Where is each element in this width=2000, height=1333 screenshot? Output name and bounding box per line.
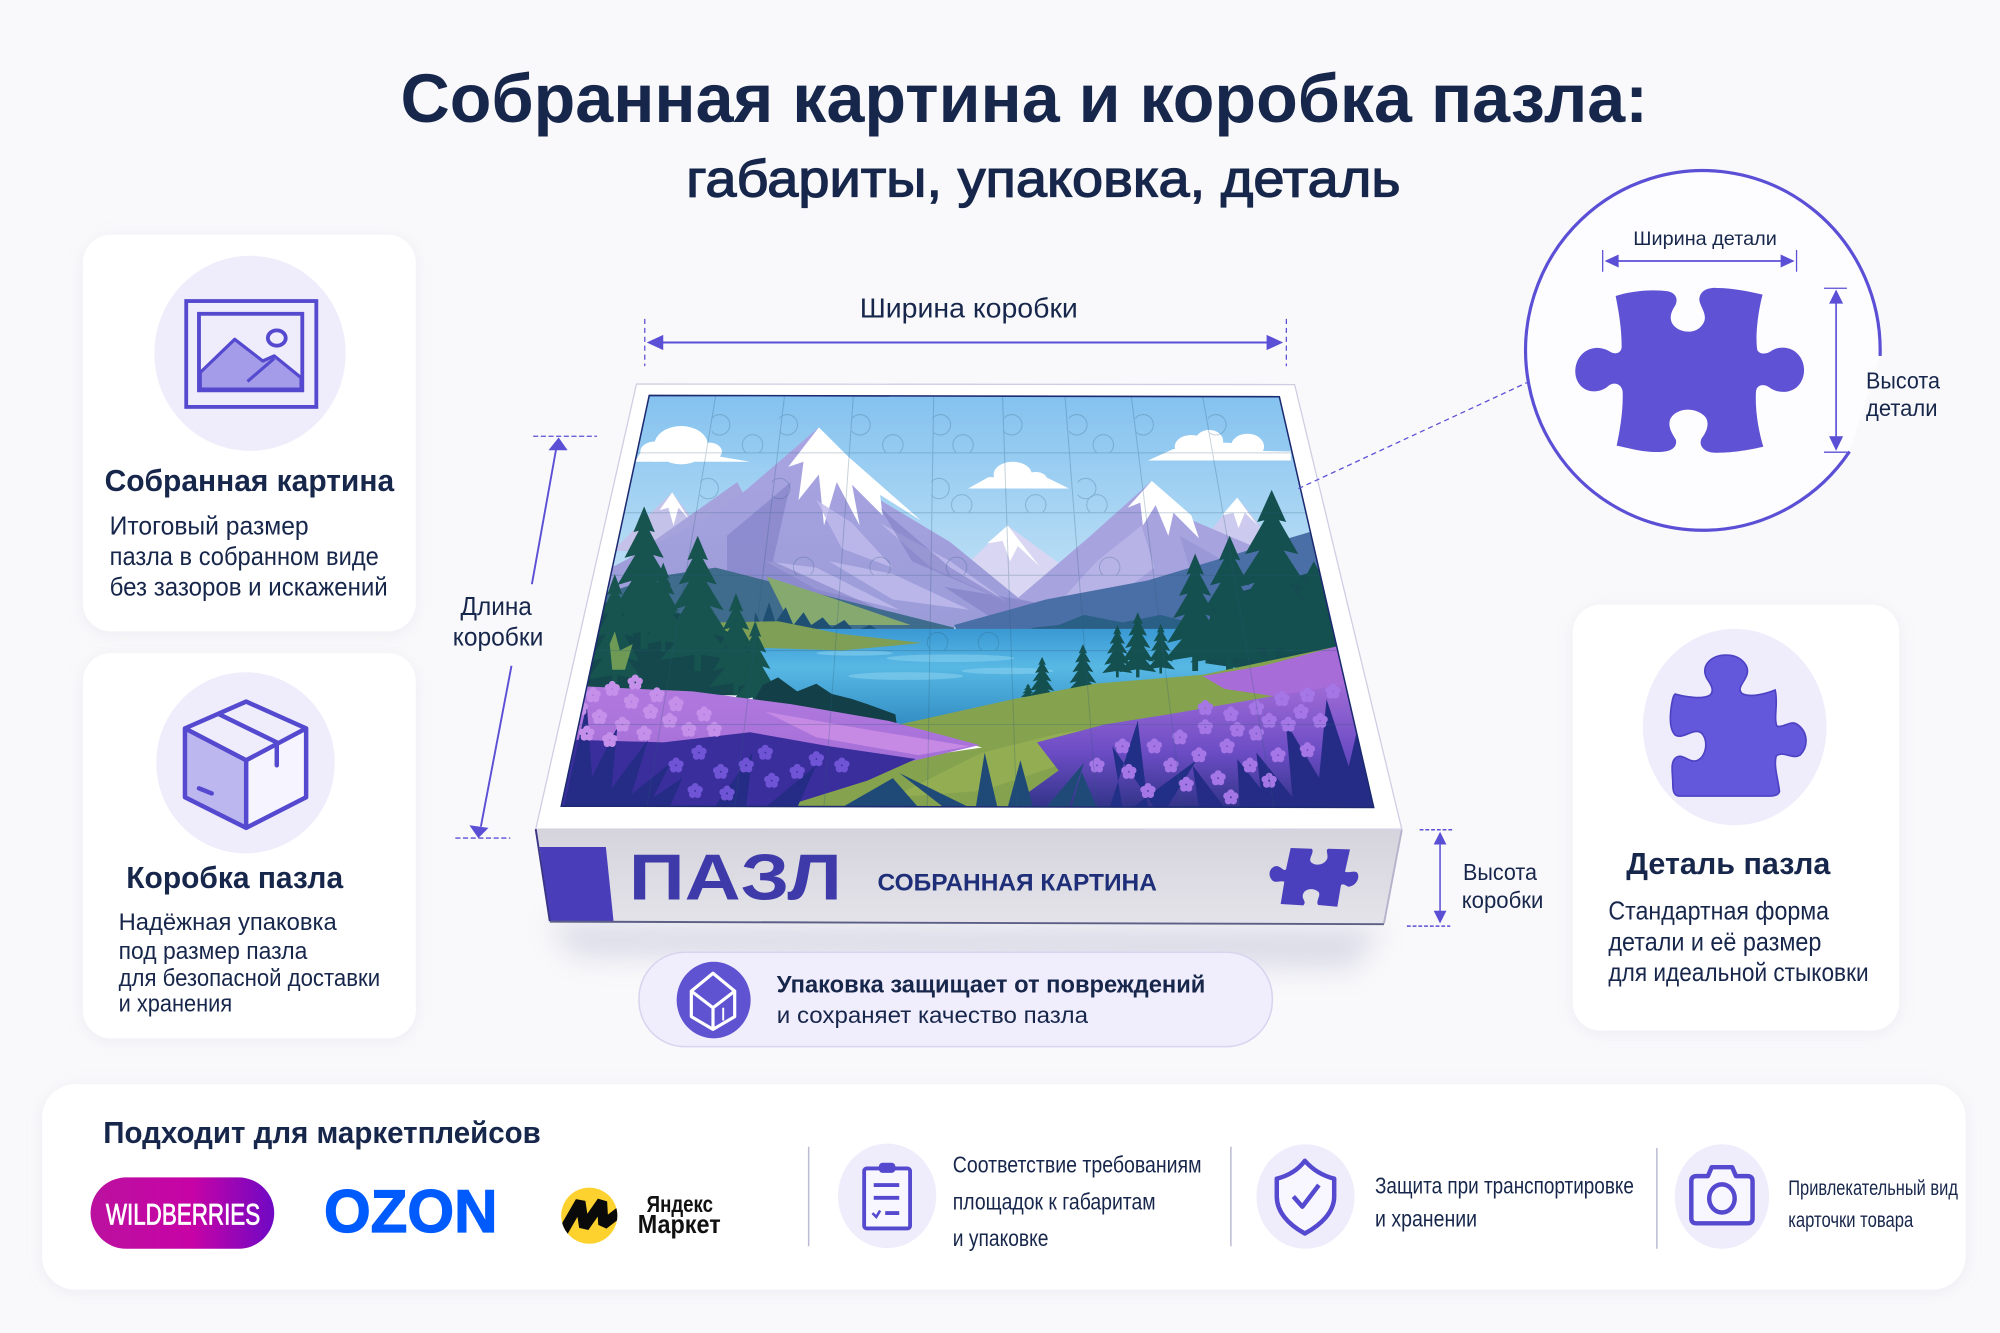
panel: assembled picture [83,235,416,631]
icon: cardboard box [156,672,335,853]
text: callout: и сохраняет качество пазла [777,1002,1088,1028]
flowers [1089,683,1341,804]
right mountain [1018,481,1250,602]
text: transport: и хранении [1375,1205,1477,1231]
lake [752,628,1237,724]
text: puzzle piece description: Стандартная форма [1608,898,1830,926]
text: puzzle piece description: для идеальной стыковки [1608,959,1869,987]
logo: Yandex Market [561,1188,721,1244]
logo: Wildberries [91,1177,274,1249]
text: requirements: площадок к габаритам [953,1188,1156,1214]
subtitle: габариты, упаковка, деталь [686,150,1401,208]
text: puzzle box description: Надёжная упаковка [119,909,337,936]
text: requirements [953,1151,1202,1251]
promontory [714,621,922,651]
text: product card [1788,1175,1958,1232]
text: assembled picture description: без зазоров и искажений [110,574,388,602]
far hills [954,532,1318,629]
puzzle cut lines [571,397,1355,807]
text: assembled picture description: пазла в собранном виде [110,543,379,571]
logo: Ozon: OZON [324,1178,497,1245]
text: callout [777,971,1205,1028]
detail circle: puzzle piece dimensions [1526,171,1940,530]
panel: puzzle box [83,653,416,1038]
title: Собранная картина и коробка пазла: [401,60,1648,137]
text: transport: Защита при транспортировке [1375,1172,1634,1198]
left green plant [610,631,633,670]
dimension: piece height [1824,288,1940,452]
left trees [588,602,750,696]
heading: puzzle box: Коробка пазла [126,861,344,895]
dark shoreline [754,677,896,723]
dimension: box height [1407,830,1543,926]
icon: picture frame [154,256,346,451]
dimension: box width [645,293,1286,366]
box label: ПАЗЛ: ПАЗЛ [629,840,842,913]
text: callout: Упаковка защищает от повреждений [777,971,1205,998]
text: requirements: Соответствие требованиям [953,1151,1202,1177]
box label: assembled picture: СОБРАННАЯ КАРТИНА [878,869,1157,896]
puzzle picture: mountain lake [548,389,1390,816]
icon: camera [1691,1167,1753,1223]
main mountain [609,428,1020,628]
clouds [635,426,1291,489]
icon: puzzle piece on box [1270,848,1358,907]
icon: clipboard [864,1163,910,1228]
callout: packaging protection [639,952,1272,1047]
box top face [536,384,1402,829]
text: puzzle piece description [1608,898,1869,987]
logo: Yandex Market: Яндекс [647,1191,713,1217]
panel: marketplaces and benefits [90,1120,1958,1251]
text: assembled picture description [110,512,388,602]
heading: marketplaces: Подходит для маркетплейсов [103,1116,541,1150]
dimension: box height: Высота [1463,859,1537,885]
dimension: piece height: Высота [1866,367,1940,393]
text: puzzle box description: для безопасной доставки [119,965,380,992]
far tree lines [754,602,876,629]
heading: assembled picture: Собранная картина [105,464,395,498]
meadows [798,646,1336,806]
panel: puzzle piece [1573,605,1899,1031]
benefit: marketplace requirements [838,1144,1202,1251]
foreground leaves [564,699,1375,807]
logo: Wildberries: WILDBERRIES [106,1199,260,1232]
text: product card: карточки товара [1788,1207,1914,1232]
text: puzzle piece description: детали и её размер [1608,928,1821,956]
dimension: piece width: Ширина детали [1633,228,1777,250]
right trees [1205,574,1335,668]
dimension: box width: Ширина коробки [860,293,1078,324]
text: puzzle box description: и хранения [119,991,232,1018]
dimension: box length: Длина [460,593,533,621]
box illustration [536,384,1402,969]
icon: protected box [677,962,751,1038]
puzzle piece large [1575,288,1804,453]
logo: Yandex Market: Маркет [638,1211,721,1239]
box front face [536,829,1402,924]
dimension: box height: коробки [1462,887,1543,913]
benefit: transport protection [1256,1144,1634,1249]
text: assembled picture description: Итоговый размер [110,512,309,540]
text: puzzle box description: под размер пазла [119,938,308,965]
benefit: attractive product card [1675,1144,1958,1249]
dimension: piece width [1603,228,1797,272]
heading: puzzle piece: Деталь пазла [1626,847,1831,881]
text: puzzle box description [119,909,380,1018]
far peaks [616,492,690,551]
dimension: piece height: детали [1866,395,1937,421]
dimension: box length [453,436,597,838]
text: requirements: и упаковке [953,1225,1048,1251]
leader: dashed line to detail [1298,383,1527,489]
dimension: box length: коробки [453,623,543,651]
icon: shield [1277,1161,1334,1234]
text: transport [1375,1172,1634,1231]
icon: puzzle piece [1643,629,1827,825]
